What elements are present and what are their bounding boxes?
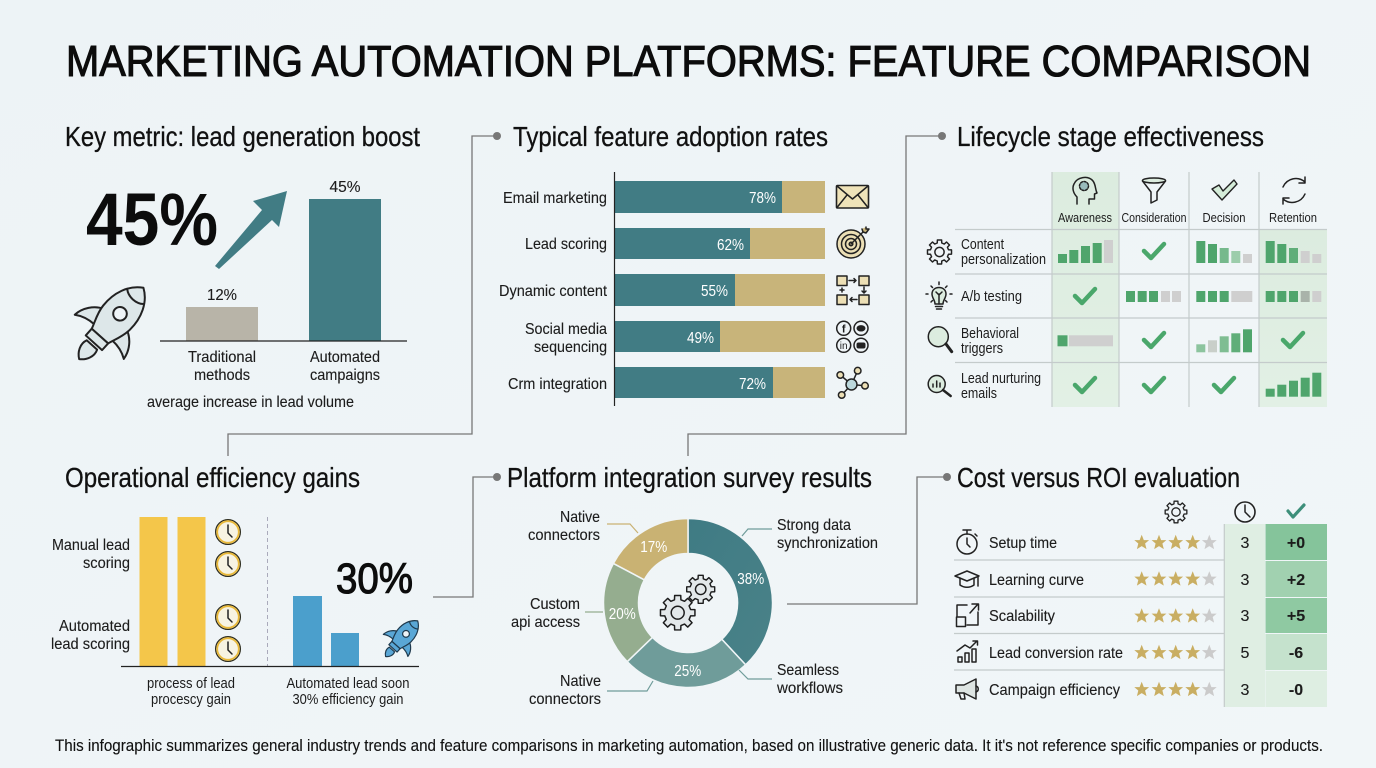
- arrow: growth: [215, 191, 287, 269]
- bar chart: adoption rates: 55%: [701, 283, 728, 300]
- column labels: Retention: [1269, 211, 1317, 225]
- row labels: Campaign efficiency: [989, 682, 1120, 699]
- donut labels: Custom: [530, 596, 580, 613]
- icon: blue rocket: [373, 610, 430, 668]
- header icon: gear: [1165, 501, 1187, 523]
- big number 30%: 30%: [336, 555, 413, 603]
- bar chart: adoption rates: Crm integration: [508, 376, 607, 393]
- bottom captions: 30% efficiency gain: [292, 691, 404, 708]
- bar chart: manual: [140, 517, 206, 666]
- bar chart: lead volume: methods: [194, 367, 250, 384]
- bar chart: adoption rates: 62%: [717, 237, 744, 254]
- connector lines: [228, 132, 951, 604]
- heading: survey: Platform integration survey results: [507, 462, 872, 493]
- side labels: Manual lead: [52, 537, 130, 554]
- score values: +0: [1287, 535, 1305, 552]
- bottom captions: procescy gain: [151, 691, 231, 708]
- heading: key metric: Key metric: lead generation boost: [65, 121, 420, 152]
- bar chart: lead volume: Traditional: [188, 349, 256, 366]
- panel: operational efficiency: [51, 462, 430, 708]
- header icon: check: [1288, 505, 1304, 517]
- row labels: Setup time: [989, 535, 1057, 552]
- side labels: [51, 537, 130, 653]
- icon: stopwatch: [957, 530, 977, 554]
- mini charts: behavioral triggers: [1058, 329, 1252, 352]
- bar chart: lead volume: 45%: [330, 179, 360, 196]
- bar chart: lead volume: [160, 179, 407, 384]
- score values: 3: [1241, 682, 1250, 699]
- icon: cycle arrows: [1283, 177, 1305, 204]
- icon: light bulb: [926, 282, 952, 309]
- score values: +5: [1287, 608, 1305, 625]
- row labels: Lead conversion rate: [989, 645, 1123, 662]
- donut labels: Native: [560, 673, 601, 690]
- icon: social networks: in: [840, 341, 848, 352]
- icon: magnifier chart: [928, 376, 951, 396]
- row labels: [989, 535, 1123, 699]
- heading: cost versus ROI: Cost versus ROI evaluation: [957, 462, 1240, 493]
- icon: head: [1073, 177, 1097, 204]
- panel: integration survey: [507, 462, 878, 708]
- donut labels: Strong data: [777, 517, 851, 534]
- icon: gear: [927, 240, 952, 264]
- bar chart: adoption rates: Social media: [525, 321, 607, 338]
- icon: graduation cap: [955, 571, 979, 587]
- icon: envelope: [836, 186, 868, 208]
- bar chart: automated: [121, 517, 419, 666]
- mini charts: a/b testing: [1126, 291, 1321, 302]
- column labels: Decision: [1202, 211, 1246, 225]
- mini chart: lead nurturing: [1266, 373, 1321, 397]
- icon: gears: [660, 575, 715, 630]
- star ratings: [1134, 535, 1217, 696]
- donut labels: Native: [560, 509, 600, 526]
- icon: megaphone: [956, 679, 978, 699]
- big number 45%: 45%: [86, 178, 218, 261]
- row labels: triggers: [961, 341, 1003, 357]
- side labels: scoring: [83, 555, 130, 572]
- panel: key metric: [55, 121, 420, 411]
- icon: conversion chart: [957, 641, 978, 662]
- bar chart: adoption rates: sequencing: [534, 339, 607, 356]
- bar chart: adoption rates: 49%: [687, 330, 714, 347]
- donut labels: synchronization: [777, 535, 878, 552]
- icon: rocket: [55, 266, 168, 381]
- icon: target: [837, 227, 869, 258]
- donut labels: Seamless: [777, 662, 839, 679]
- heading: lifecycle: Lifecycle stage effectiveness: [957, 121, 1264, 152]
- heading: feature adoption: Typical feature adoption rates: [513, 121, 828, 152]
- donut labels: workflows: [776, 680, 843, 697]
- bar chart: lead volume: campaigns: [310, 367, 380, 384]
- side labels: lead scoring: [51, 636, 130, 653]
- row labels: Behavioral: [961, 326, 1019, 342]
- icon: magnifier: [928, 327, 952, 352]
- score values: 3: [1241, 608, 1250, 625]
- side labels: Automated: [59, 618, 130, 635]
- row labels: emails: [961, 386, 997, 402]
- row labels: Scalability: [989, 608, 1055, 625]
- bar chart: adoption rates: 78%: [749, 190, 776, 207]
- bar chart: lead volume: 12%: [207, 287, 237, 304]
- table shading: [954, 524, 1327, 707]
- donut labels: connectors: [528, 527, 600, 544]
- icons: clocks: [216, 520, 240, 661]
- caption: average increase: average increase in lead volume: [147, 394, 354, 411]
- donut values: 20%: [609, 606, 636, 623]
- row labels: [961, 237, 1046, 402]
- score values: -0: [1289, 682, 1303, 699]
- icon: social networks: f: [842, 324, 846, 336]
- column labels: [1058, 211, 1317, 225]
- score values: 3: [1241, 535, 1250, 552]
- panel: lifecycle effectiveness: [926, 121, 1327, 407]
- donut values: [609, 539, 764, 680]
- bar chart: adoption rates: 72%: [739, 376, 766, 393]
- icon: scalability: [956, 604, 978, 626]
- icon: funnel: [1142, 178, 1166, 203]
- score values: 5: [1241, 645, 1250, 662]
- bar chart: adoption rates: [499, 172, 825, 406]
- bottom captions: Automated lead soon: [286, 675, 410, 692]
- panel: feature adoption: [499, 121, 869, 406]
- column labels: Awareness: [1058, 211, 1112, 225]
- score values: [1241, 535, 1305, 699]
- score values: -6: [1289, 645, 1303, 662]
- bar chart: adoption rates: Email marketing: [503, 190, 607, 207]
- donut labels: api access: [511, 614, 580, 631]
- row labels: personalization: [961, 252, 1046, 268]
- row labels: A/b testing: [961, 289, 1022, 305]
- mini charts: content personalization: [1058, 240, 1321, 263]
- donut chart: [604, 518, 772, 687]
- panel: cost versus ROI: [954, 462, 1327, 707]
- icon: check outline: [1212, 180, 1237, 200]
- icon: social networks: [837, 321, 868, 352]
- column labels: Consideration: [1122, 211, 1187, 225]
- score values: 3: [1241, 572, 1250, 589]
- heading: efficiency: Operational efficiency gains: [65, 462, 360, 493]
- donut values: 17%: [640, 539, 667, 556]
- icon: network nodes: [837, 367, 868, 398]
- donut values: 25%: [674, 663, 701, 680]
- bar chart: adoption rates: Lead scoring: [525, 236, 607, 253]
- table grid: [955, 172, 1327, 407]
- donut labels: [511, 509, 878, 708]
- leader lines: [585, 524, 772, 691]
- header icon: clock: [1235, 502, 1255, 522]
- bar chart: lead volume: Automated: [310, 349, 380, 366]
- bar chart: adoption rates: Dynamic content: [499, 283, 607, 300]
- check marks: [1075, 244, 1303, 392]
- bottom captions: process of lead: [147, 675, 235, 692]
- icon: workflow boxes: [837, 276, 869, 304]
- row labels: Lead nurturing: [961, 371, 1041, 387]
- row labels: Content: [961, 237, 1004, 253]
- donut labels: connectors: [529, 691, 601, 708]
- bottom captions: [147, 675, 410, 708]
- row labels: Learning curve: [989, 572, 1084, 589]
- donut values: 38%: [737, 571, 764, 588]
- score values: +2: [1287, 572, 1305, 589]
